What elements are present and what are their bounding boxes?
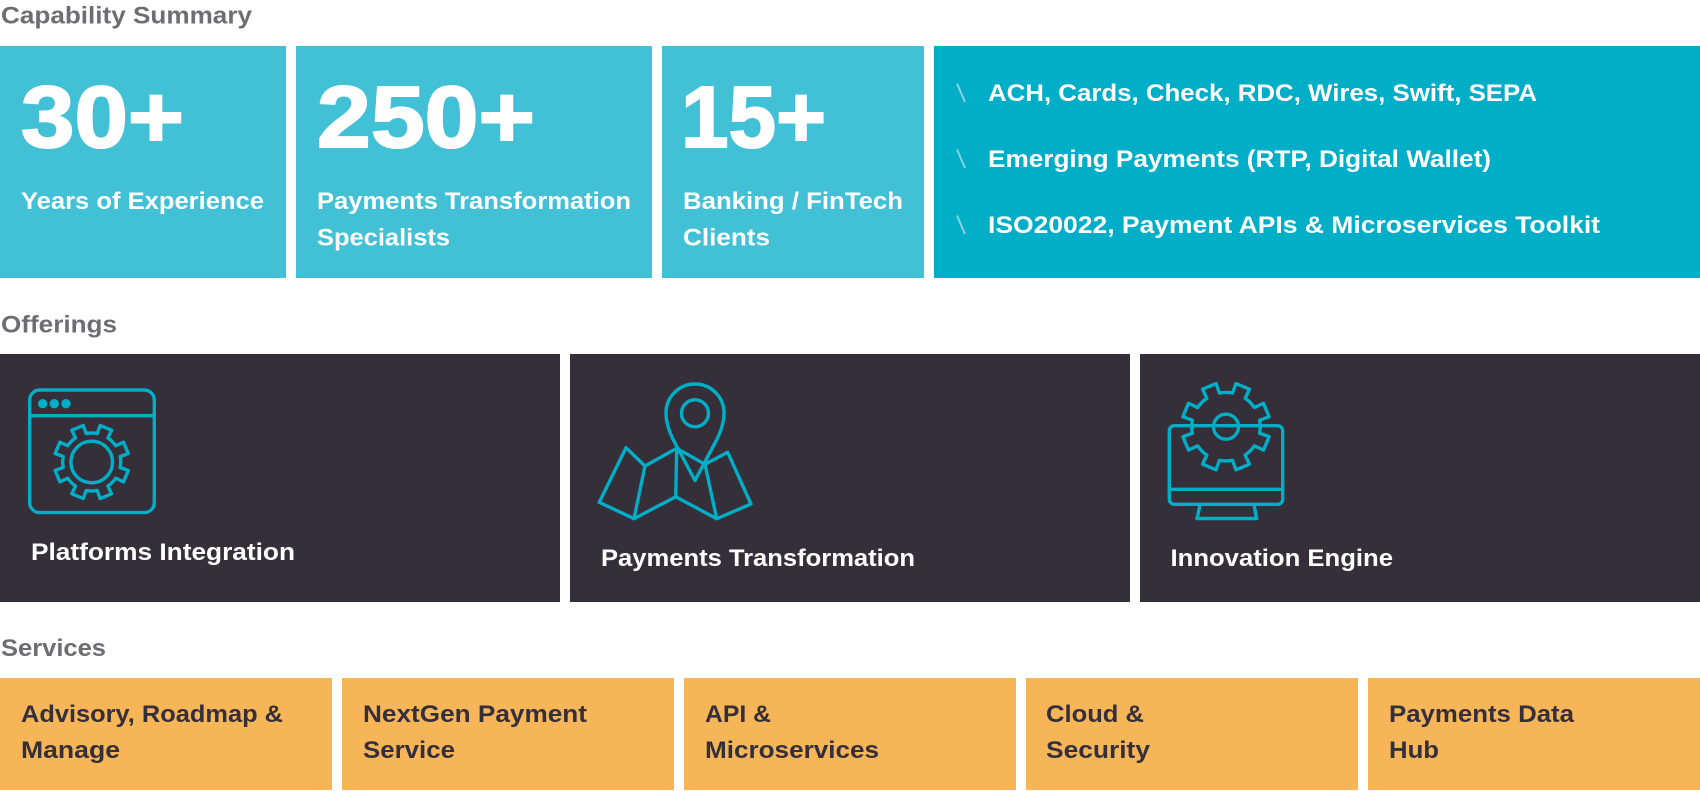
panel: 250+ payments transformation specialists: Specialists xyxy=(317,224,450,252)
icon: monitor with gear xyxy=(1169,384,1283,518)
panel: payment capabilities list xyxy=(934,46,1700,278)
panel: platforms integration xyxy=(0,354,560,602)
panel: 15+ banking and fintech clients: Banking / FinTech xyxy=(683,188,903,215)
heading: Offerings: Offerings xyxy=(1,312,117,338)
panel: payment capabilities list: Emerging Payments (RTP, Digital Wallet) xyxy=(988,146,1491,173)
icon: browser window with gear xyxy=(30,390,154,513)
panel: 30+ years of experience: Years of Experience xyxy=(21,188,264,215)
panel: innovation engine xyxy=(1140,354,1700,602)
panel: cloud and security xyxy=(1026,678,1358,790)
heading: Capability Summary: Capability Summary xyxy=(1,2,253,30)
panel: advisory, roadmap and manage: Manage xyxy=(21,737,120,764)
panel: 15+ banking and fintech clients: 15+ xyxy=(681,69,826,166)
panel: 250+ payments transformation specialists xyxy=(296,46,652,278)
panel: 15+ banking and fintech clients xyxy=(662,46,924,278)
panel: nextgen payment service xyxy=(342,678,674,790)
panel: 30+ years of experience: 30+ xyxy=(21,69,184,166)
icon: map with location pin xyxy=(599,384,751,519)
panel: payment capabilities list: ACH, Cards, Check, RDC, Wires, Swift, SEPA xyxy=(988,80,1537,107)
panel: 15+ banking and fintech clients: Clients xyxy=(683,224,770,252)
panel: 250+ payments transformation specialists: Payments Transformation xyxy=(317,188,631,215)
panel: payments data hub: Payments Data xyxy=(1389,701,1575,728)
panel: nextgen payment service: NextGen Payment xyxy=(363,701,587,728)
panel: nextgen payment service: Service xyxy=(363,737,455,764)
panel: payments transformation xyxy=(570,354,1130,602)
panel: platforms integration: Platforms Integration xyxy=(31,539,295,566)
panel: payments transformation: Payments Transformation xyxy=(601,545,915,572)
panel: advisory, roadmap and manage xyxy=(0,678,332,790)
panel: payment capabilities list: ISO20022, Payment APIs & Microservices Toolkit xyxy=(988,212,1600,239)
heading: Services: Services xyxy=(1,635,106,662)
panel: payments data hub: Hub xyxy=(1389,737,1439,764)
panel: api and microservices xyxy=(684,678,1016,790)
panel: api and microservices: Microservices xyxy=(705,737,879,764)
panel: advisory, roadmap and manage: Advisory, Roadmap & xyxy=(21,701,283,728)
panel: api and microservices: API & xyxy=(705,701,771,728)
panel: innovation engine: Innovation Engine xyxy=(1170,545,1393,572)
panel: cloud and security: Cloud & xyxy=(1046,701,1144,728)
panel: payments data hub xyxy=(1368,678,1700,790)
panel: cloud and security: Security xyxy=(1046,737,1151,764)
panel: 30+ years of experience xyxy=(0,46,286,278)
panel: 250+ payments transformation specialists: 250+ xyxy=(317,69,535,166)
